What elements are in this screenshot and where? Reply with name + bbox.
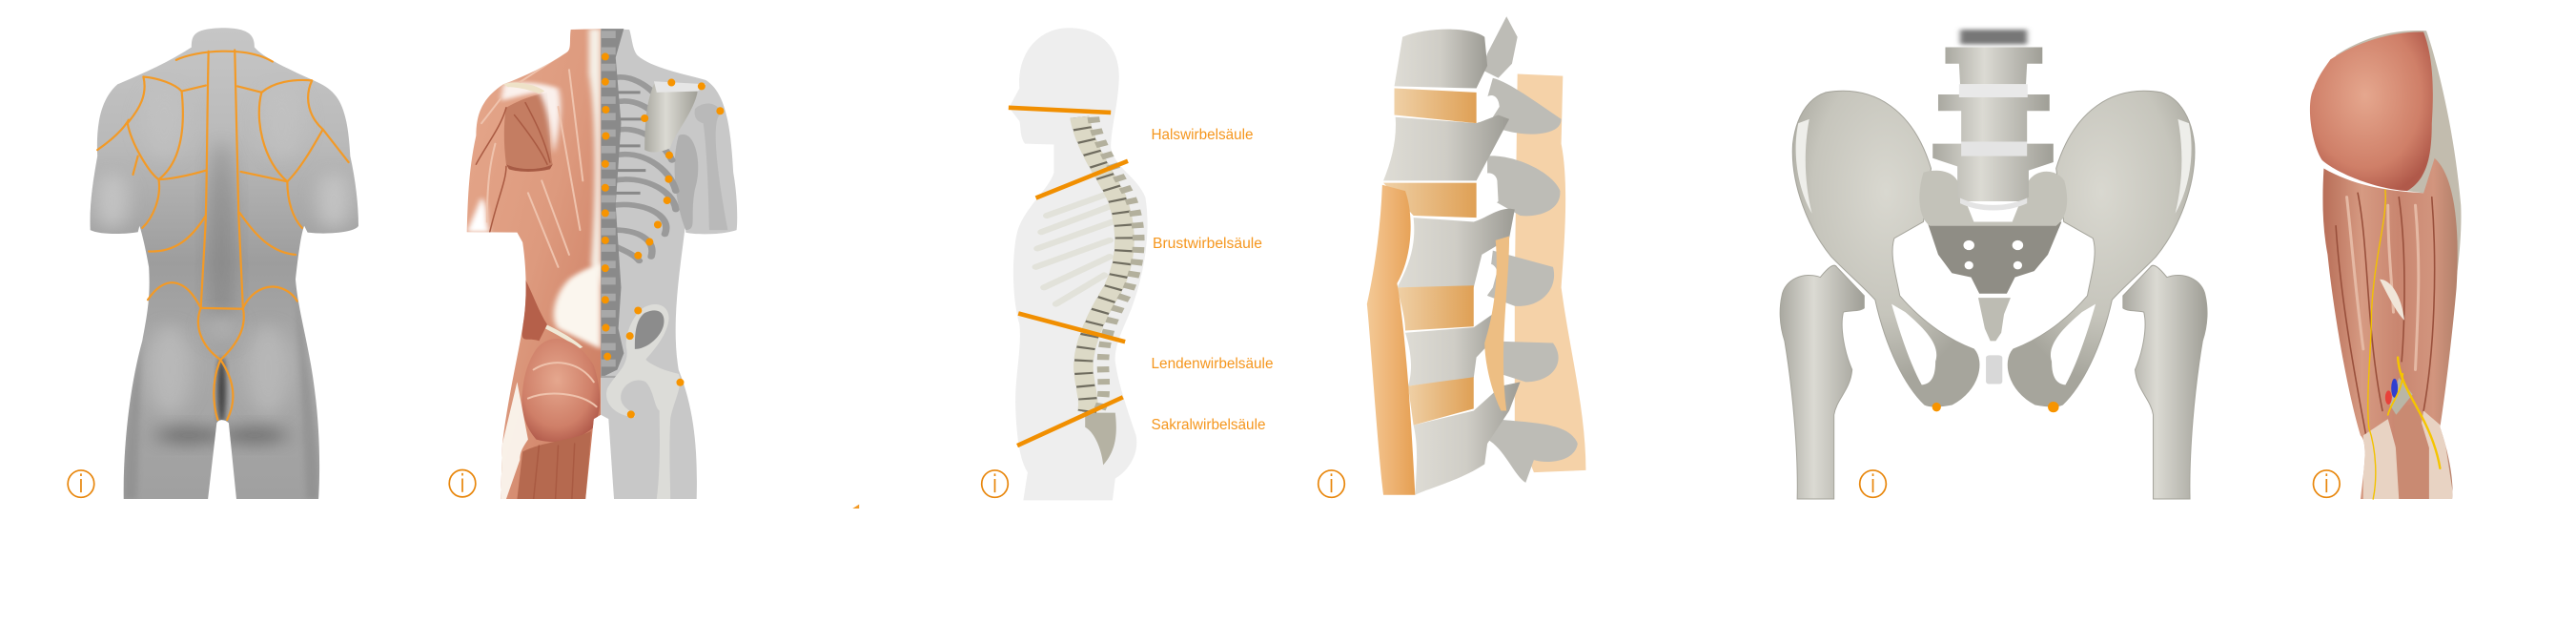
spinous processes [1482, 16, 1578, 483]
torso figure [91, 28, 358, 499]
region dividing bars [1009, 108, 1128, 446]
panel: muscles and skeleton [449, 25, 859, 509]
right hip bone [2008, 91, 2195, 406]
panel: spine regions [982, 28, 1274, 500]
panel: pelvis bones [1780, 30, 2207, 499]
fascia band [2336, 31, 2462, 296]
pubic symphysis [1986, 355, 2002, 384]
muscle half [465, 25, 602, 501]
left hip bone [1792, 91, 1979, 406]
thigh muscles [2320, 156, 2462, 501]
landmark dots [602, 52, 724, 418]
vertebral column [1079, 117, 1138, 465]
coccyx [1978, 298, 2011, 341]
intervertebral discs [1383, 89, 1477, 426]
icon: info [68, 470, 94, 497]
interspinous ligament strip [1484, 237, 1509, 410]
panel: back surface regions [68, 28, 358, 499]
icon: info [1319, 470, 1344, 497]
icon: info [982, 470, 1008, 497]
ischium dots [1932, 402, 2059, 412]
foramen gaps [1474, 95, 1500, 405]
skeleton [601, 29, 727, 499]
rib cage [1036, 193, 1113, 304]
small orange mark [852, 505, 859, 509]
panel: gluteal and thigh muscles [2310, 31, 2462, 501]
sacrum [1919, 171, 2067, 294]
body silhouette, side view [1009, 28, 1148, 500]
icon: info [449, 469, 476, 497]
label: Lendenwirbelsäule: Lendenwirbelsäule [1152, 356, 1274, 372]
anterior ligament [1367, 185, 1415, 495]
right half body silhouette [601, 29, 737, 499]
label: Sakralwirbelsäule: Sakralwirbelsäule [1152, 417, 1266, 433]
label: Halswirbelsäule: Halswirbelsäule [1152, 127, 1253, 143]
panel: lumbar vertebrae with ligaments [1319, 16, 1585, 497]
posterior ligament [1515, 73, 1585, 472]
gluteus muscle [2310, 31, 2433, 191]
lumbar vertebrae [1932, 30, 2054, 211]
vertebral bodies [1383, 30, 1521, 495]
icon: info [1860, 470, 1886, 497]
left femur [1780, 265, 1864, 499]
right femur [2123, 265, 2207, 499]
nerves and vessels [2368, 190, 2440, 499]
icon: info [2314, 470, 2340, 497]
label: Brustwirbelsäule: Brustwirbelsäule [1153, 236, 1262, 252]
orange region outlines [97, 51, 349, 420]
